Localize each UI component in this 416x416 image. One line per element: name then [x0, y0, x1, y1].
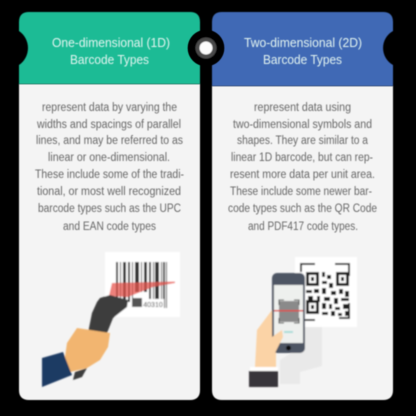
heading: 1D: One-dimensional (1D): [52, 36, 170, 50]
card header: 2D: [212, 12, 393, 86]
text block: 2D description: [228, 102, 377, 233]
text block: 2D description: code types such as the QR Code: [228, 203, 377, 215]
text block: 1D description: barcode types such as the UPC: [38, 203, 181, 215]
text block: 2D description: linear 1D barcode, but can rep-: [231, 152, 373, 164]
text block: 1D description: represent data by varying the: [42, 102, 177, 114]
text block: 2D description: resent more data per unit area.: [230, 169, 375, 181]
text block: 1D description: widths and spacings of parallel: [36, 119, 181, 131]
connector: center ring: [188, 30, 224, 66]
text block: 1D description: These include some of the tradi-: [35, 169, 184, 181]
scanner handle: [88, 295, 128, 333]
heading: 2D: Two-dimensional (2D): [244, 36, 362, 50]
card header: 1D: [19, 12, 200, 84]
panel: 2D barcode types: [212, 12, 393, 400]
heading: 1D: [52, 36, 170, 67]
sleeve: [249, 371, 278, 387]
text block: 1D description: tional, or most well recognized: [37, 186, 181, 198]
heading: 2D: [244, 36, 362, 67]
text block: 1D description: and EAN code types: [63, 221, 156, 233]
panel: 1D barcode types: [19, 12, 200, 400]
icon: hand scanning a barcode: [42, 252, 180, 387]
text block: 2D description: represent data using: [254, 102, 351, 114]
phone shadow: [280, 322, 322, 384]
text block: 1D description: [35, 102, 184, 233]
card body: 2D: [212, 86, 393, 400]
heading: 1D: Barcode Types: [70, 53, 149, 67]
text block: 2D description: two-dimensional symbols and: [233, 119, 372, 131]
QR code: [295, 257, 357, 327]
icon: phone scanning a QR code: [249, 257, 357, 387]
text block: 1D description: linear or one-dimensional.: [48, 152, 170, 164]
sleeve: [42, 352, 72, 387]
card body: 1D: [19, 84, 200, 400]
heading: 2D: Barcode Types: [263, 53, 342, 67]
text block: 2D description: and PDF417 code types.: [248, 221, 358, 233]
phone: [272, 273, 305, 353]
barcode label: 40310: [143, 302, 163, 309]
text block: 2D description: These include some newer bar-: [230, 186, 372, 198]
text block: 1D description: lines, and may be referred to as: [36, 135, 183, 147]
hand: [255, 310, 276, 367]
hand: [65, 328, 110, 372]
cuff: [250, 367, 278, 371]
thumb: [272, 330, 283, 353]
text block: 2D description: shapes. They are similar to a: [237, 135, 369, 147]
scanner beam: [109, 282, 175, 297]
